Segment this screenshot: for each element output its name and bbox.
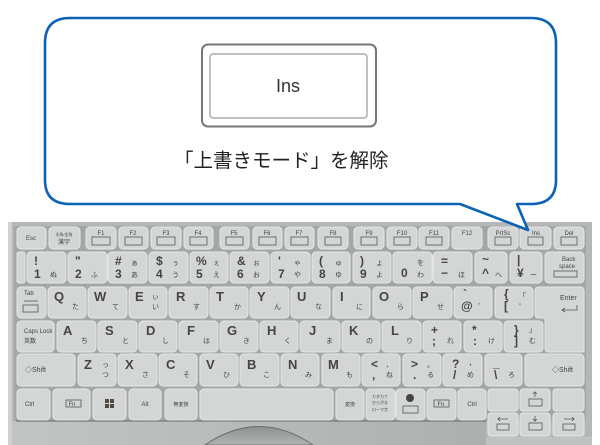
QWERTY key row: せ xyxy=(437,303,444,311)
ASDF key row: F xyxy=(187,323,195,338)
number key row: ゃ xyxy=(294,260,301,267)
function key row: F12 xyxy=(462,231,473,237)
number key row: ょ xyxy=(376,260,383,267)
bottom key row: ローマ字 xyxy=(372,406,388,412)
function key row: F7 xyxy=(295,231,303,237)
number key row: 9 xyxy=(360,267,367,281)
function key row: Ins xyxy=(532,231,540,237)
number key row: ぅ xyxy=(172,260,179,267)
bottom key row: 変換 xyxy=(345,401,355,408)
ZXCV key row: こ xyxy=(263,371,270,379)
ASDF key row: L xyxy=(391,323,399,338)
ASDF key row: : xyxy=(473,334,477,348)
number key row: う xyxy=(172,271,179,279)
number key row: え xyxy=(213,271,220,279)
number key row: わ xyxy=(417,271,424,279)
number key row: ふ xyxy=(91,271,98,279)
QWERTY key row: 「 xyxy=(519,292,526,300)
QWERTY key row: ん xyxy=(274,303,281,311)
ZXCV key row: っ xyxy=(102,362,109,369)
function key row: F1 xyxy=(97,231,105,237)
ZXCV key row xyxy=(17,354,584,386)
keyboard photo xyxy=(8,222,592,445)
touchpad arc xyxy=(205,426,313,445)
ZXCV key row: そ xyxy=(183,371,190,379)
ZXCV key row: 。 xyxy=(427,362,434,369)
ZXCV key row: . xyxy=(413,368,416,382)
ZXCV key row: / xyxy=(453,368,457,382)
QWERTY key row: R xyxy=(176,289,186,304)
function key row: 半角/全角 xyxy=(55,231,73,237)
number key row: 3 xyxy=(115,267,122,281)
ZXCV key row: つ xyxy=(102,372,109,379)
number key row: space xyxy=(559,264,576,270)
key: Enter: Enter xyxy=(560,295,577,302)
arrow key cluster xyxy=(488,389,584,436)
ASDF key row: き xyxy=(243,337,250,345)
number key row: ぇ xyxy=(213,260,220,267)
QWERTY key row: な xyxy=(315,303,322,311)
number key row: ) xyxy=(360,254,364,268)
bottom key row: 無変換 xyxy=(173,401,189,408)
ASDF key row: ま xyxy=(326,337,333,345)
number key row: ~ xyxy=(482,252,489,266)
function key row xyxy=(17,227,584,249)
ASDF key row: G xyxy=(227,323,237,338)
ZXCV key row: ◇Shift xyxy=(25,366,46,374)
number key row: ' xyxy=(278,254,281,268)
ZXCV key row: \ xyxy=(494,368,498,382)
bottom key row: ひらがな xyxy=(372,399,388,405)
number key row: % xyxy=(196,254,207,268)
ASDF key row: の xyxy=(366,338,373,345)
QWERTY key row: た xyxy=(72,303,79,311)
ASDF key row: く xyxy=(284,337,291,345)
function key row: 漢字 xyxy=(58,238,70,246)
number key row: 1 xyxy=(34,267,41,281)
function key row: F4 xyxy=(194,231,202,237)
ZXCV key row: C xyxy=(166,357,176,372)
ASDF key row: S xyxy=(105,323,114,338)
key: Enter xyxy=(535,287,584,352)
bottom key row xyxy=(17,389,486,420)
QWERTY key row: ゛ xyxy=(478,303,485,311)
QWERTY key row: W xyxy=(94,289,107,304)
icon: Ins key xyxy=(202,44,376,126)
number key row: & xyxy=(237,254,246,268)
bottom key row: Fn xyxy=(437,402,445,408)
keyboard body xyxy=(8,222,592,445)
bottom key row: Alt xyxy=(141,402,149,408)
number key row: ゅ xyxy=(335,260,342,267)
ZXCV key row: ? xyxy=(452,357,459,371)
callout bubble xyxy=(45,18,556,230)
number key row: # xyxy=(115,254,122,268)
ASDF key row: は xyxy=(203,337,210,345)
number key row: ¥ xyxy=(517,266,524,280)
ZXCV key row: M xyxy=(328,357,339,372)
number key row: あ xyxy=(131,271,138,279)
QWERTY key row: U xyxy=(297,289,306,304)
QWERTY key row: P xyxy=(420,289,429,304)
QWERTY key row: [ xyxy=(504,299,508,313)
QWERTY key row: Q xyxy=(54,289,64,304)
QWERTY key row: O xyxy=(379,289,389,304)
ASDF key row: J xyxy=(309,323,316,338)
QWERTY key row: ぃ xyxy=(152,294,159,301)
function key row: F5 xyxy=(230,231,238,237)
caption: 「上書きモード」を解除 xyxy=(174,150,389,172)
QWERTY key row: す xyxy=(193,303,200,311)
number key row: を xyxy=(417,259,424,267)
function key row: Del xyxy=(564,231,574,237)
ZXCV key row: Z xyxy=(84,357,92,372)
ASDF key row: * xyxy=(472,323,477,337)
number key row xyxy=(17,252,584,283)
ZXCV key row: ・ xyxy=(467,362,474,369)
QWERTY key row: ` xyxy=(463,287,467,301)
ZXCV key row: ひ xyxy=(223,371,230,379)
function key row: PrtSc xyxy=(496,231,510,237)
function key row: F2 xyxy=(129,231,137,237)
number key row: ぬ xyxy=(50,271,57,279)
number key row: − xyxy=(441,266,448,280)
number key row: お xyxy=(253,271,260,279)
QWERTY key row: か xyxy=(234,303,241,311)
number key row: Back xyxy=(562,257,576,263)
number key row: 4 xyxy=(156,267,163,281)
number key row: " xyxy=(75,254,81,268)
ZXCV key row: る xyxy=(427,371,434,379)
icon: Ins key: Ins xyxy=(276,76,300,96)
number key row: $ xyxy=(156,254,163,268)
ZXCV key row: 、 xyxy=(386,362,393,369)
number key row: ! xyxy=(34,254,38,268)
function key row: F9 xyxy=(365,231,373,237)
number key row: ほ xyxy=(458,271,465,279)
QWERTY key row: に xyxy=(356,303,363,311)
ASDF key row: け xyxy=(488,337,495,345)
ZXCV key row: さ xyxy=(142,371,149,379)
ZXCV key row: ね xyxy=(386,371,393,379)
QWERTY key row: { xyxy=(504,287,509,301)
QWERTY key row: て xyxy=(112,304,119,311)
QWERTY key row: ゜ xyxy=(519,303,526,311)
bottom key row: カタカナ xyxy=(372,393,388,399)
ASDF key row: と xyxy=(122,337,129,345)
ASDF key row: H xyxy=(267,323,276,338)
ASDF key row: } xyxy=(514,323,519,337)
function key row: Esc xyxy=(26,236,36,242)
number key row: 7 xyxy=(278,267,285,281)
number key row: 8 xyxy=(319,267,326,281)
ZXCV key row: B xyxy=(247,357,256,372)
ASDF key row: D xyxy=(146,323,155,338)
function key row: F3 xyxy=(162,231,170,237)
number key row: 6 xyxy=(237,267,244,281)
ASDF key row: Caps Lock xyxy=(24,329,53,335)
number key row: へ xyxy=(495,272,502,279)
ZXCV key row: も xyxy=(346,371,353,379)
number key row: 0 xyxy=(401,266,408,280)
ASDF key row: し xyxy=(162,337,169,345)
number key row: ( xyxy=(319,254,323,268)
QWERTY key row: ら xyxy=(397,303,404,311)
function key row: F6 xyxy=(263,231,271,237)
ZXCV key row: V xyxy=(206,357,215,372)
ASDF key row: り xyxy=(406,337,413,345)
ZXCV key row: > xyxy=(411,357,418,371)
QWERTY key row: い xyxy=(152,303,159,311)
ASDF key row: ち xyxy=(81,337,88,345)
function key row: F8 xyxy=(329,231,337,237)
ZXCV key row: , xyxy=(372,368,375,382)
ASDF key row: K xyxy=(349,323,359,338)
function key row: F11 xyxy=(429,231,440,237)
number key row: 5 xyxy=(196,267,203,281)
ASDF key row: む xyxy=(529,337,536,345)
number key row: や xyxy=(294,271,301,279)
ASDF key row: 英数 xyxy=(24,337,36,345)
bottom key row: Ctrl xyxy=(467,402,477,408)
bottom key row: Ctrl xyxy=(25,402,34,408)
number key row: よ xyxy=(376,271,383,279)
QWERTY key row: Y xyxy=(257,289,266,304)
QWERTY key row: I xyxy=(340,289,344,304)
function key row: F10 xyxy=(397,231,408,237)
ZXCV key row: ◇Shift xyxy=(552,366,573,374)
QWERTY key row: T xyxy=(216,289,224,304)
number key row: ^ xyxy=(482,266,489,280)
QWERTY key row: @ xyxy=(461,299,473,313)
number key row: | xyxy=(517,253,520,267)
number key row: ぉ xyxy=(253,260,260,267)
bottom key row: Fn xyxy=(68,402,76,408)
QWERTY key row xyxy=(17,287,533,318)
number key row: ゆ xyxy=(335,271,342,279)
ZXCV key row: X xyxy=(125,357,134,372)
QWERTY key row: Tab xyxy=(24,291,34,297)
ZXCV key row: _ xyxy=(492,356,500,370)
number key row: ぁ xyxy=(131,260,138,267)
number key row: 2 xyxy=(75,267,82,281)
ASDF key row: + xyxy=(431,323,438,337)
ZXCV key row: め xyxy=(467,371,474,379)
ZXCV key row: < xyxy=(371,357,378,371)
ZXCV key row: ろ xyxy=(508,371,515,379)
number key row: = xyxy=(441,254,448,268)
ASDF key row: ] xyxy=(514,334,518,348)
ASDF key row: ; xyxy=(432,334,436,348)
QWERTY key row: E xyxy=(135,289,144,304)
ASDF key row: A xyxy=(63,323,73,338)
ASDF key row xyxy=(17,321,543,352)
ZXCV key row: み xyxy=(305,371,312,379)
ZXCV key row: N xyxy=(288,357,297,372)
ASDF key row: れ xyxy=(447,337,454,345)
ASDF key row: 」 xyxy=(529,327,536,334)
number key row: ー xyxy=(530,272,537,279)
